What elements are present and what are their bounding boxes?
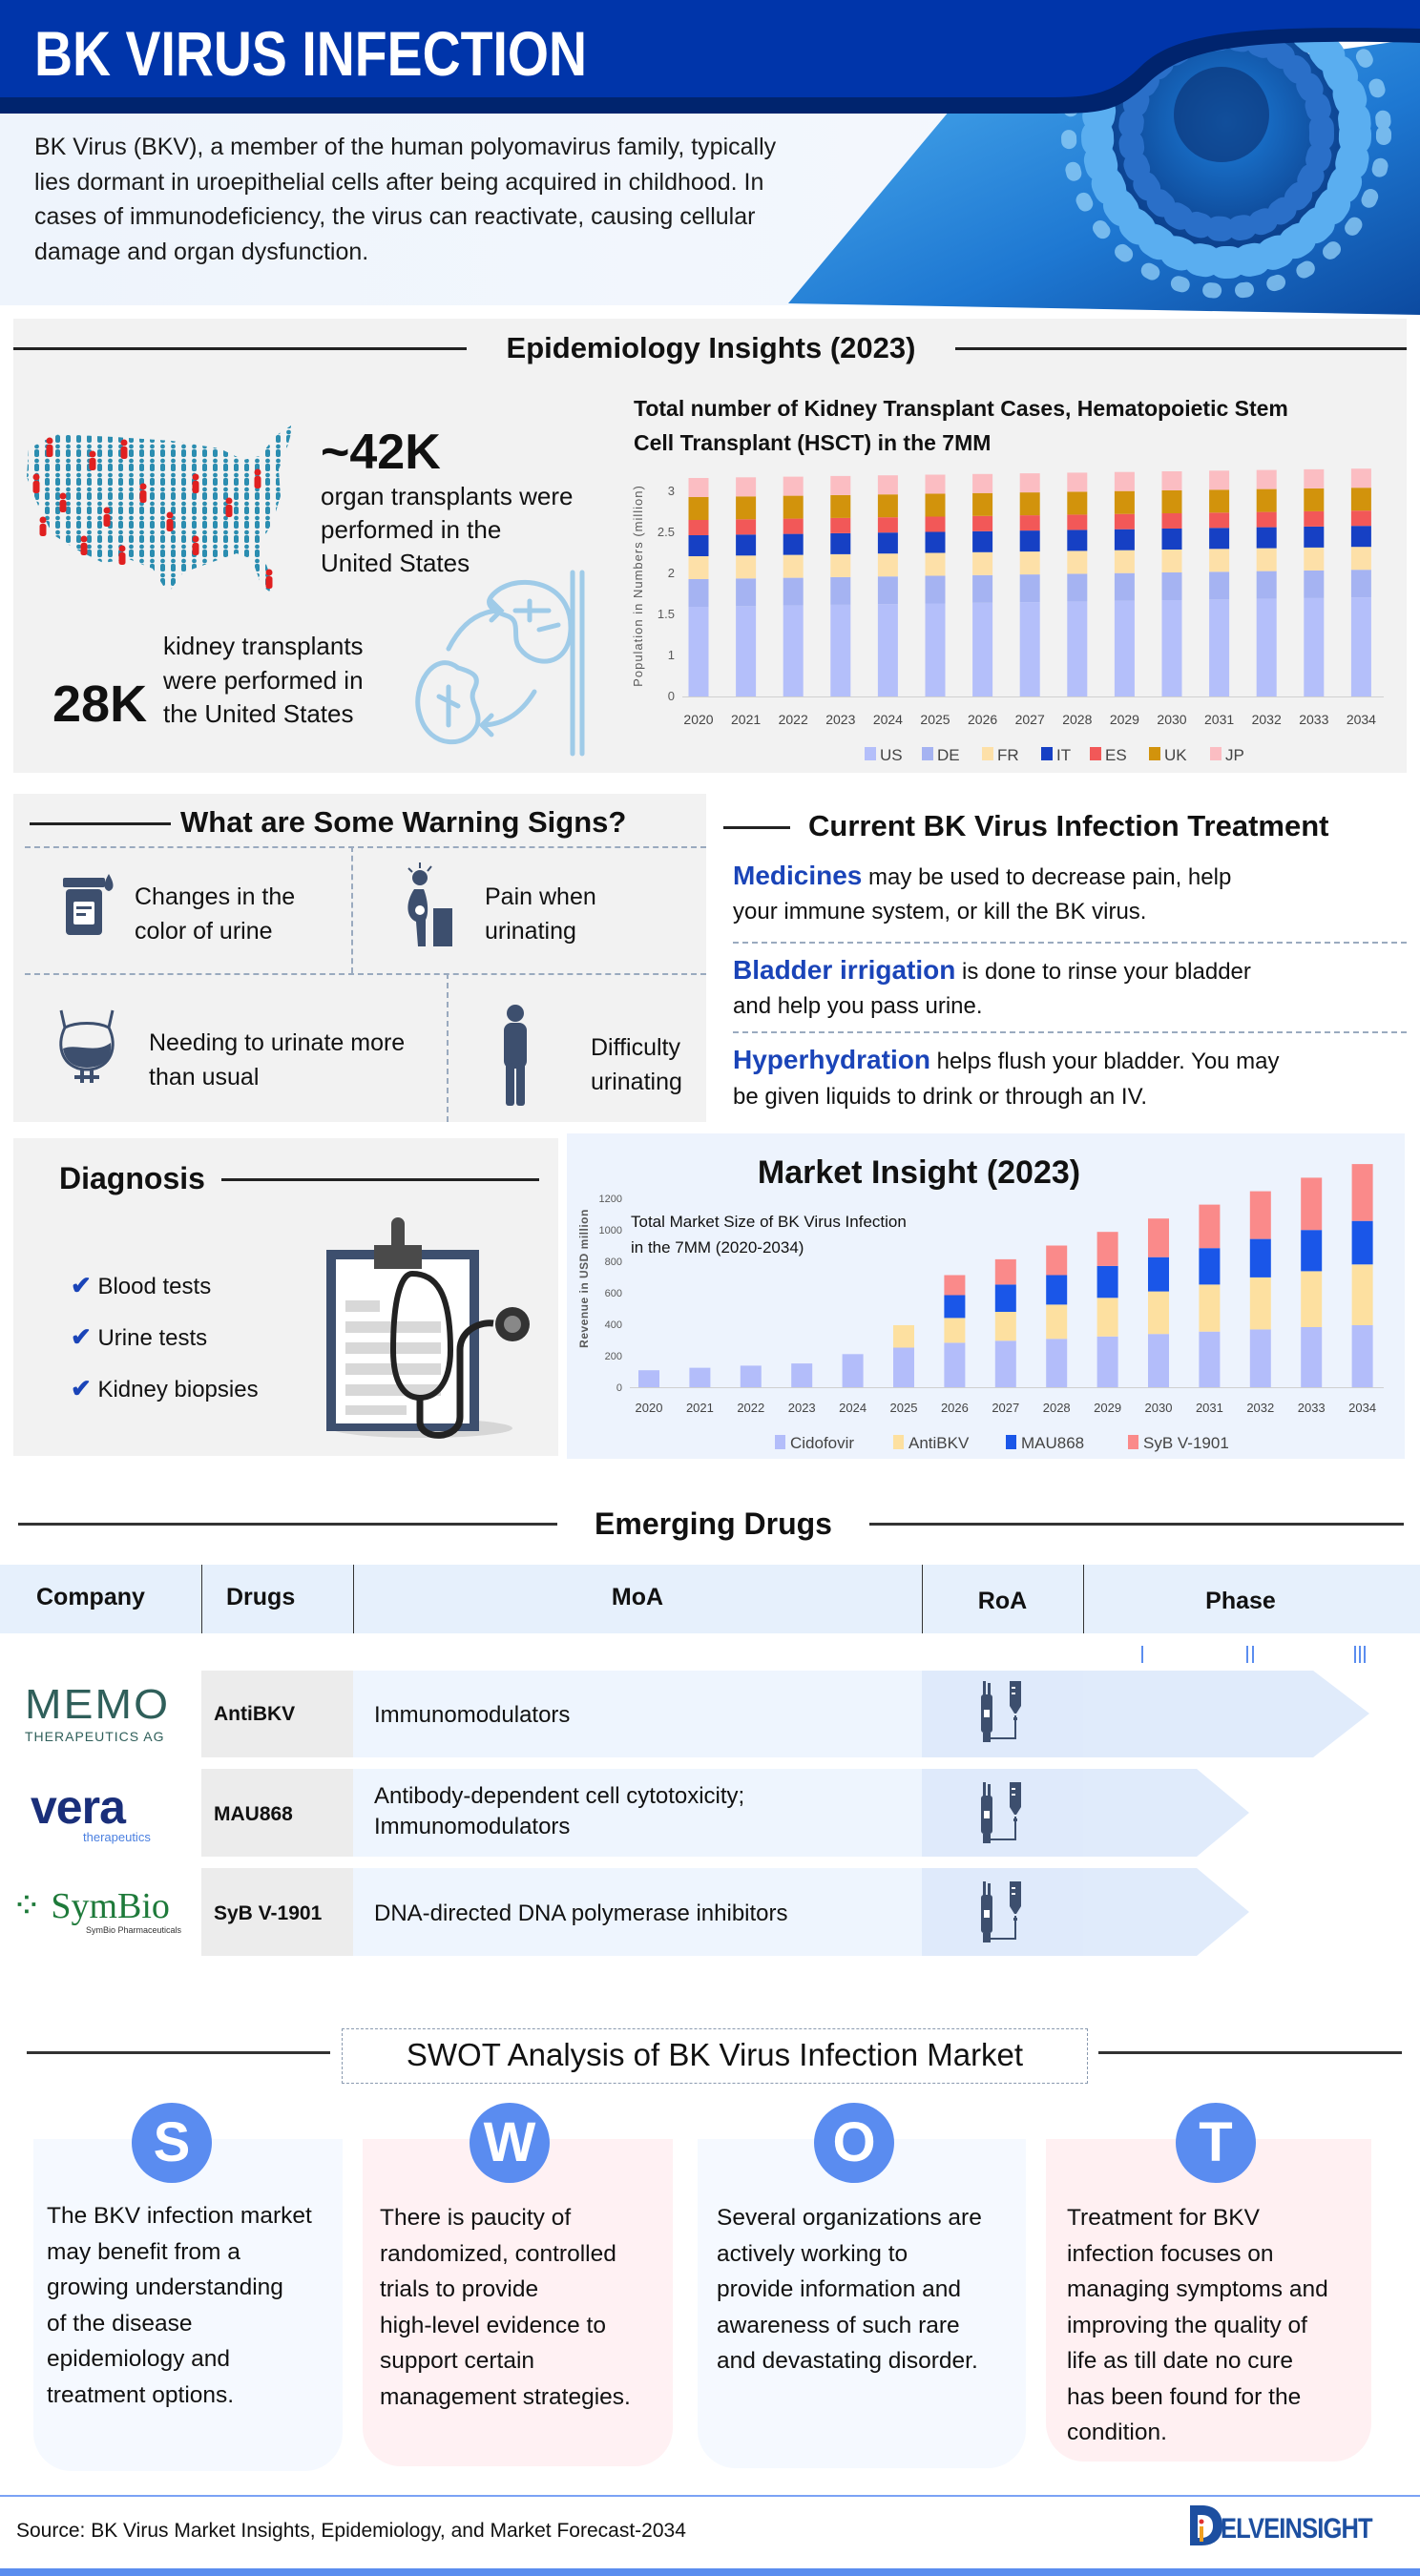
chart: market size stacked bars: 400 [605, 1319, 622, 1331]
logo: MEMO therapeutics: MEMO [25, 1681, 170, 1728]
legend: JP [1225, 746, 1244, 764]
legend: UK [1164, 746, 1187, 764]
market legend: MAU868 [1021, 1434, 1084, 1452]
row: MAU868: Immunomodulators [374, 1814, 570, 1839]
sign: pain when urinating: urinating [485, 918, 576, 945]
market heading: Market Insight (2023) [758, 1154, 1080, 1191]
swot card: threats: improving the quality of [1067, 2313, 1307, 2337]
table header: emerging drugs: Phase [1205, 1588, 1276, 1614]
chart: market size stacked bars: 2032 [1246, 1401, 1274, 1415]
chart: market size stacked bars: 2034 [1348, 1401, 1376, 1415]
chart subtitle: in the 7MM (2020-2034) [631, 1238, 804, 1257]
heading: SWOT: SWOT Analysis of BK Virus Infection Market [407, 2037, 1023, 2072]
legend: ES [1105, 746, 1127, 764]
panel: diagnosis [13, 1138, 558, 1456]
chart: market size stacked bars: 2028 [1043, 1401, 1071, 1415]
intro text: damage and organ dysfunction. [34, 239, 368, 265]
chart: kidney transplant cases stacked bars: 2026 [968, 712, 997, 727]
header virus image [0, 0, 1420, 315]
table header: emerging drugs: MoA [612, 1584, 663, 1610]
logo: MEMO therapeutics: THERAPEUTICS AG [25, 1729, 164, 1744]
chart subtitle [631, 1213, 907, 1257]
sign: urinate more: Needing to urinate more [149, 1029, 405, 1056]
row: MAU868: Antibody-dependent cell cytotoxicity; [374, 1783, 744, 1809]
heading: treatment: Current BK Virus Infection Treatment [808, 809, 1328, 842]
panel: warning signs [13, 794, 706, 1122]
list: diagnosis tests: ✔ Urine tests [71, 1322, 207, 1351]
chart: kidney transplant cases stacked bars: 3 [668, 484, 675, 498]
logo: SymBio: ⁘ SymBio [11, 1886, 170, 1926]
heading: emerging drugs: Emerging Drugs [595, 1506, 832, 1541]
footer source text: Source: BK Virus Market Insights, Epidemiology, and Market Forecast-2034 [16, 2520, 686, 2542]
heading: emerging drugs [18, 1506, 1404, 1541]
swot card: opportunities: and devastating disorder. [717, 2348, 978, 2374]
swot card: opportunities: provide information and [717, 2276, 961, 2302]
sign: difficulty urinating [504, 1005, 682, 1106]
chart: market size stacked bars: 2022 [737, 1401, 764, 1415]
chart: kidney transplant cases stacked bars: 2020 [683, 712, 714, 727]
logo: SymBio: SymBio Pharmaceuticals [86, 1925, 181, 1935]
row: MAU868: MAU868 [214, 1803, 293, 1825]
list: diagnosis tests [71, 1271, 259, 1402]
panel: epidemiology [13, 319, 1407, 773]
chart: market size stacked bars: 2023 [788, 1401, 816, 1415]
legend: FR [997, 746, 1019, 764]
swot card: strengths: epidemiology and [47, 2346, 230, 2372]
chart: kidney transplant cases stacked bars [631, 396, 1384, 764]
stat: 28K kidney transplants: kidney transplants [163, 632, 364, 660]
chart: market size stacked bars: 2026 [941, 1401, 969, 1415]
list: diagnosis tests: ✔ Blood tests [71, 1271, 211, 1299]
chart: market size stacked bars: 1000 [599, 1225, 622, 1236]
chart: kidney transplant cases stacked bars: 2027 [1015, 712, 1045, 727]
icon: kidneys [415, 571, 584, 756]
table rows [201, 1671, 1369, 1956]
intro text [34, 134, 776, 265]
heading: diagnosis [59, 1161, 539, 1195]
chart title [634, 396, 1288, 455]
row: SyB V-1901: DNA-directed DNA polymerase inhibitors [374, 1901, 788, 1926]
swot card: threats [1046, 2103, 1371, 2462]
heading: epidemiology: Epidemiology Insights (2023) [507, 331, 915, 364]
chart: kidney transplant cases stacked bars: 2024 [873, 712, 903, 727]
chart: kidney transplant cases stacked bars: 2028 [1062, 712, 1093, 727]
swot card: strengths: The BKV infection market [47, 2203, 312, 2229]
chart: market size stacked bars: 0 [616, 1382, 622, 1394]
swot card: threats: infection focuses on [1067, 2240, 1274, 2267]
treatment: hyperhydration: Hyperhydration helps flush your bladder. You may [733, 1045, 1280, 1074]
heading: SWOT [27, 2028, 1402, 2084]
chart: kidney transplant cases stacked bars: 1 [668, 648, 675, 662]
chart: kidney transplant cases stacked bars: Population in Numbers (million) [631, 485, 645, 687]
chart: market size stacked bars: 2020 [636, 1401, 662, 1415]
swot card: threats: Treatment for BKV [1067, 2205, 1260, 2231]
chart: market size stacked bars: 2029 [1094, 1401, 1121, 1415]
treatment: medicines: Medicines may be used to decrease pain, help [733, 861, 1231, 890]
table header: emerging drugs: Company [36, 1584, 145, 1610]
chart: market size stacked bars: 1200 [599, 1194, 622, 1205]
sign: pain when urinating: Pain when [485, 883, 596, 910]
chart: kidney transplant cases stacked bars: 2023 [825, 712, 856, 727]
stat: 42K organ transplants: performed in the [321, 515, 501, 544]
swot card: strengths: may benefit from a [47, 2238, 240, 2265]
chart: kidney transplant cases stacked bars: 2030 [1157, 712, 1187, 727]
swot card: weaknesses: There is paucity of [380, 2205, 571, 2231]
treatment: medicines: your immune system, or kill the BK virus. [733, 899, 1146, 924]
chart: market size stacked bars: 600 [605, 1288, 622, 1299]
legend [865, 746, 1244, 764]
icon: clipboard and stethoscope [326, 1217, 530, 1439]
icon: US map of people [27, 426, 291, 592]
heading: diagnosis: Diagnosis [59, 1161, 205, 1195]
chart: kidney transplant cases stacked bars: 2025 [920, 712, 950, 727]
market legend [775, 1434, 1229, 1452]
row: AntiBKV: Immunomodulators [374, 1702, 570, 1728]
logo: vera therapeutics: vera [31, 1780, 125, 1834]
swot card: opportunities: awareness of such rare [717, 2313, 960, 2337]
chart: market size stacked bars: 2030 [1145, 1401, 1172, 1415]
chart: kidney transplant cases stacked bars: 2021 [731, 712, 761, 727]
chart: market size stacked bars: 2021 [686, 1401, 714, 1415]
logo: DelveInsight: ELVEINSIGHT [1221, 2513, 1372, 2545]
chart: kidney transplant cases stacked bars: 2022 [779, 712, 808, 727]
swot card: threats: has been found for the [1067, 2383, 1301, 2410]
panel: market insight [567, 1133, 1405, 1459]
chart title: Total number of Kidney Transplant Cases, Hematopoietic Stem [634, 396, 1288, 421]
sign: difficulty urinating: urinating [591, 1069, 682, 1095]
chart: market size stacked bars: 2024 [839, 1401, 867, 1415]
swot card: opportunities: O [832, 2111, 876, 2173]
stat: 42K organ transplants [321, 425, 573, 577]
sign: pain when urinating [407, 862, 596, 946]
sign: urine color: Changes in the [135, 883, 295, 910]
chart: kidney transplant cases stacked bars: 2032 [1252, 712, 1282, 727]
swot card: strengths [33, 2103, 343, 2471]
chart: kidney transplant cases stacked bars: 2031 [1204, 712, 1234, 727]
panel: diagnosis: ✔ Kidney biopsies [71, 1374, 259, 1402]
chart: kidney transplant cases stacked bars: 2033 [1299, 712, 1329, 727]
table header: emerging drugs [0, 1565, 1420, 1633]
chart: kidney transplant cases stacked bars: 2.5 [658, 525, 675, 539]
market legend: AntiBKV [908, 1434, 970, 1452]
intro text: cases of immunodeficiency, the virus can reactivate, causing cellular [34, 203, 755, 230]
treatment: medicines [733, 861, 1231, 924]
treatment: bladder irrigation: and help you pass urine. [733, 993, 983, 1019]
swot card: weaknesses: management strategies. [380, 2383, 631, 2410]
legend: IT [1056, 746, 1071, 764]
stat: 42K organ transplants: ~42K [321, 425, 441, 480]
chart: market size stacked bars [577, 1154, 1384, 1452]
table header: emerging drugs: RoA [978, 1588, 1027, 1614]
chart: kidney transplant cases stacked bars: 2 [668, 566, 675, 580]
swot card: weaknesses: support certain [380, 2348, 534, 2374]
stat: 28K kidney transplants: the United States [163, 699, 353, 728]
swot card: strengths: treatment options. [47, 2381, 234, 2408]
stat: 28K kidney transplants [52, 632, 364, 733]
swot card: weaknesses [363, 2103, 673, 2466]
table header: emerging drugs: Drugs [226, 1584, 295, 1610]
swot card: strengths: of the disease [47, 2311, 193, 2336]
chart: market size stacked bars: 2027 [992, 1401, 1019, 1415]
chart: kidney transplant cases stacked bars: 2029 [1110, 712, 1139, 727]
intro text: lies dormant in uroepithelial cells after being acquired in childhood. In [34, 168, 763, 195]
legend: US [880, 746, 903, 764]
swot card: threats: managing symptoms and [1067, 2276, 1328, 2302]
chart title: Cell Transplant (HSCT) in the 7MM [634, 430, 991, 455]
logo: vera therapeutics: therapeutics [83, 1830, 151, 1844]
panel: treatment [723, 809, 1407, 1110]
stat: 28K kidney transplants: 28K [52, 675, 147, 733]
heading: epidemiology [13, 331, 1407, 364]
chart subtitle: Total Market Size of BK Virus Infection [631, 1213, 907, 1231]
swot card: weaknesses: randomized, controlled [380, 2240, 616, 2267]
swot card: opportunities: actively working to [717, 2240, 908, 2267]
market legend: Cidofovir [790, 1434, 854, 1452]
chart: kidney transplant cases stacked bars: 0 [668, 689, 675, 703]
chart: market size stacked bars: 2025 [890, 1401, 917, 1415]
chart: kidney transplant cases stacked bars: 2034 [1347, 712, 1376, 727]
row: AntiBKV: AntiBKV [214, 1703, 295, 1725]
swot card: opportunities [698, 2103, 1026, 2468]
title: BK VIRUS INFECTION [34, 18, 587, 89]
stat: 42K organ transplants: United States [321, 549, 470, 577]
swot card: strengths: S [154, 2111, 190, 2173]
stat: 28K kidney transplants: were performed in [163, 666, 364, 695]
logo: vera therapeutics [31, 1780, 151, 1844]
swot card: opportunities: Several organizations are [717, 2205, 982, 2231]
heading: warning signs: What are Some Warning Signs? [180, 805, 626, 839]
market legend: SyB V-1901 [1143, 1434, 1229, 1452]
sign: difficulty urinating: Difficulty [591, 1034, 680, 1061]
swot card: threats: condition. [1067, 2420, 1167, 2445]
sign: urinate more [59, 1009, 405, 1091]
treatment: bladder irrigation: Bladder irrigation is done to rinse your bladder [733, 955, 1251, 985]
treatment: hyperhydration [733, 1045, 1280, 1110]
swot card: threats: T [1199, 2111, 1233, 2173]
row: MAU868 [201, 1769, 1249, 1857]
phase markers [1141, 1646, 1366, 1663]
chart: kidney transplant cases stacked bars: 1.5 [658, 607, 675, 621]
treatment: hyperhydration: be given liquids to drink or through an IV. [733, 1084, 1147, 1110]
sign: urine color: color of urine [135, 918, 273, 945]
treatment: bladder irrigation [733, 955, 1251, 1019]
chart: market size stacked bars: 2031 [1196, 1401, 1223, 1415]
row: AntiBKV [201, 1671, 1369, 1757]
sign: urine color [63, 874, 295, 945]
swot card: weaknesses: W [484, 2111, 535, 2173]
sign: urinate more: than usual [149, 1064, 259, 1091]
intro text: BK Virus (BKV), a member of the human polyomavirus family, typically [34, 134, 776, 160]
swot card: weaknesses: high-level evidence to [380, 2313, 606, 2337]
swot card: strengths: growing understanding [47, 2275, 283, 2300]
row: SyB V-1901: SyB V-1901 [214, 1902, 323, 1924]
stat: 42K organ transplants: organ transplants were [321, 482, 573, 510]
chart: market size stacked bars: 2033 [1298, 1401, 1326, 1415]
chart: market size stacked bars: 800 [605, 1257, 622, 1268]
swot card: threats: life as till date no cure [1067, 2348, 1293, 2374]
legend: DE [937, 746, 960, 764]
chart: market size stacked bars: Revenue in USD million [577, 1209, 591, 1348]
swot card: weaknesses: trials to provide [380, 2276, 538, 2302]
chart: market size stacked bars: 200 [605, 1351, 622, 1362]
logo: DelveInsight [1190, 2505, 1372, 2545]
row: SyB V-1901 [201, 1868, 1249, 1956]
